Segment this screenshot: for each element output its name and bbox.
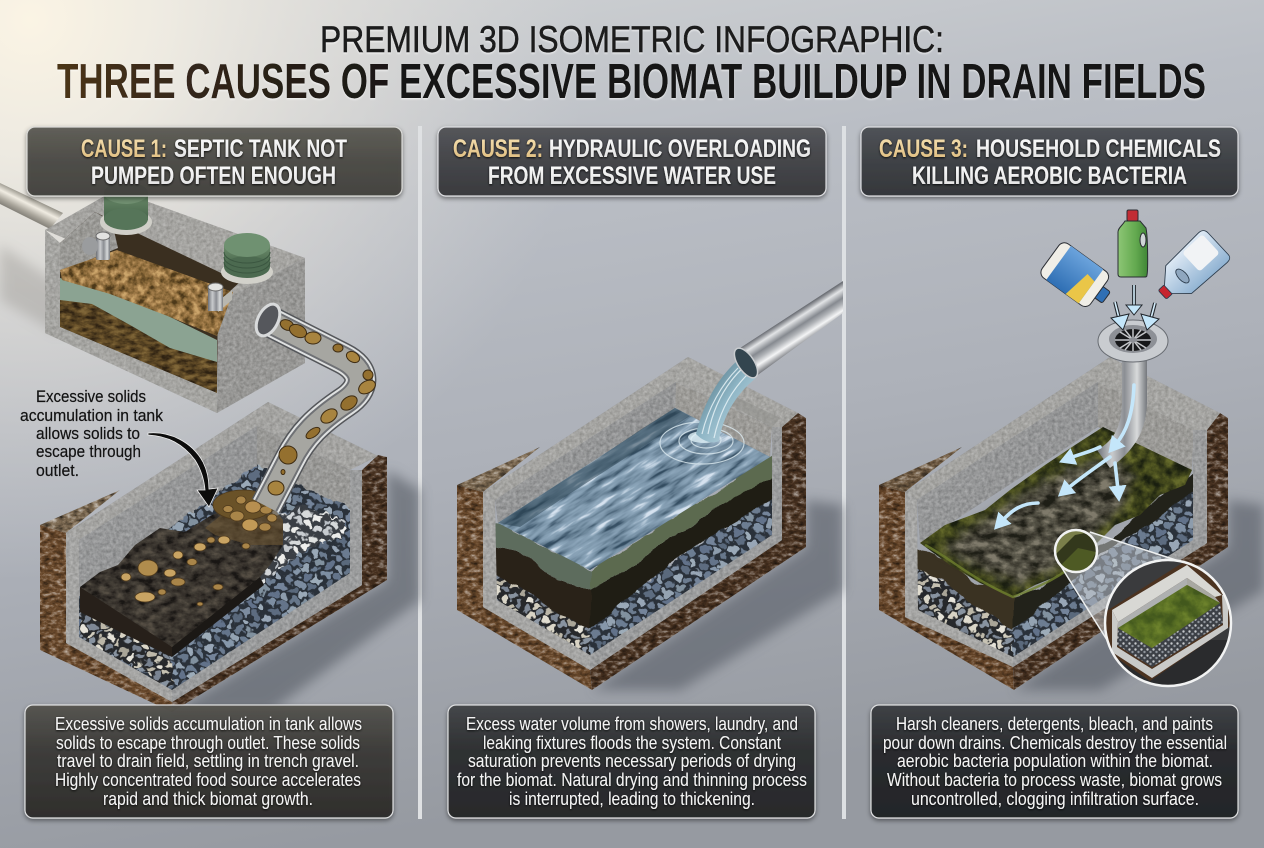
- callout text: [20, 388, 164, 480]
- pipe: [730, 281, 843, 382]
- heading panel: cause 3: [861, 127, 1238, 196]
- text panel: cause 1 description: rapid and thick biomat growth.: [103, 789, 313, 809]
- outlet pipe with escaping solids: [251, 300, 378, 506]
- manhole lid: rear: [100, 182, 152, 235]
- heading panel: cause 3: CAUSE 3:: [879, 135, 968, 163]
- large lens with healthy mini trench: [1100, 560, 1240, 690]
- heading panel: cause 2: [438, 127, 826, 196]
- magnifier callout: [1054, 528, 1232, 688]
- callout text: allows solids to: [36, 425, 140, 443]
- bottle: white bleach jug: [1148, 228, 1232, 310]
- septic tank: [0, 182, 305, 413]
- text panel: cause 2 description: [448, 705, 815, 818]
- heading panel: cause 2: FROM EXCESSIVE WATER USE: [488, 162, 776, 190]
- callout text: escape through: [36, 443, 141, 461]
- text panel: cause 3 description: uncontrolled, clogging infiltration surface.: [911, 789, 1199, 809]
- text panel: cause 1 description: Excessive solids accumulation in tank allows: [55, 714, 362, 734]
- text panel: cause 1 description: Highly concentrated food source accelerates: [55, 770, 361, 790]
- inlet pipe: [0, 183, 63, 229]
- callout text: accumulation in tank: [20, 407, 164, 425]
- manhole lid: front: [221, 233, 273, 284]
- solids pile: [121, 490, 277, 606]
- trench shadow: [172, 470, 420, 712]
- tank shadow: [0, 245, 60, 335]
- text panel: cause 1 description: solids to escape through outlet. These solids: [56, 733, 360, 753]
- trench shadow: [1014, 500, 1264, 690]
- trench block: septic drain field: [40, 402, 387, 712]
- divider: left: [418, 126, 422, 819]
- heading panel: cause 2: HYDRAULIC OVERLOADING: [549, 135, 811, 163]
- water stream: [696, 360, 756, 442]
- text panel: cause 2 description: saturation prevents necessary periods of drying: [468, 751, 796, 771]
- text panel: cause 2 description: for the biomat. Natural drying and thinning process: [457, 770, 807, 790]
- flow arrows: [1002, 385, 1134, 521]
- text panel: cause 3 description: Harsh cleaners, detergents, bleach, and paints: [896, 714, 1213, 734]
- water surface: [498, 408, 770, 570]
- divider: right: [842, 126, 846, 819]
- title line 1: PREMIUM 3D ISOMETRIC INFOGRAPHIC:: [320, 18, 944, 60]
- bottle: green detergent: [1118, 210, 1148, 277]
- arrow: callout to solids: [148, 433, 218, 507]
- biomat side faces: [914, 470, 1198, 630]
- pour arrows: [1115, 285, 1155, 322]
- panel: cause 2 illustration: [457, 281, 849, 696]
- drain pipe: [1097, 358, 1147, 468]
- magnifier cone: [1057, 532, 1182, 640]
- trench block: [457, 357, 806, 690]
- internal tee pipe: [82, 232, 110, 260]
- callout text: Excessive solids: [36, 388, 146, 406]
- text panel: cause 2 description: leaking fixtures floods the system. Constant: [483, 733, 781, 753]
- text panel: cause 3 description: aerobic bacteria population within the biomat.: [897, 751, 1213, 771]
- pour arrow heads: [1111, 305, 1159, 330]
- text panel: cause 2 description: Excess water volume from showers, laundry, and: [466, 714, 798, 734]
- small lens: [1054, 528, 1098, 574]
- title: [57, 18, 1206, 109]
- heading panel: cause 1: [27, 127, 402, 196]
- heading panel: cause 2: CAUSE 2:: [453, 135, 543, 163]
- heading panel: cause 1: SEPTIC TANK NOT: [174, 135, 347, 163]
- heading panel: cause 1: PUMPED OFTEN ENOUGH: [91, 162, 336, 190]
- gravel: [492, 565, 590, 660]
- text panel: cause 2 description: is interrupted, leading to thickening.: [509, 789, 755, 809]
- heading panel: cause 1: CAUSE 1:: [81, 135, 167, 163]
- bottle: blue cleaner: [1038, 240, 1119, 315]
- panel: cause 3 illustration: [879, 210, 1264, 690]
- text panel: cause 3 description: [871, 705, 1238, 818]
- trench shadow: [592, 500, 843, 690]
- biomat top surface: [920, 427, 1192, 597]
- internal outlet pipe: [208, 283, 223, 311]
- tank contents: [60, 250, 233, 393]
- text panel: cause 1 description: [25, 705, 393, 818]
- callout text: outlet.: [36, 462, 79, 480]
- text panel: cause 1 description: travel to drain field, settling in trench gravel.: [57, 751, 359, 771]
- trench block: [879, 382, 1228, 690]
- text panel: cause 3 description: Without bacteria to process waste, biomat grows: [887, 770, 1222, 790]
- biomat faces: [490, 452, 778, 628]
- biomat layer: [80, 498, 283, 657]
- panel: cause 1 illustration: [0, 182, 420, 712]
- heading panel: cause 3: KILLING AEROBIC BACTERIA: [912, 162, 1187, 190]
- floor drain: [1098, 320, 1168, 362]
